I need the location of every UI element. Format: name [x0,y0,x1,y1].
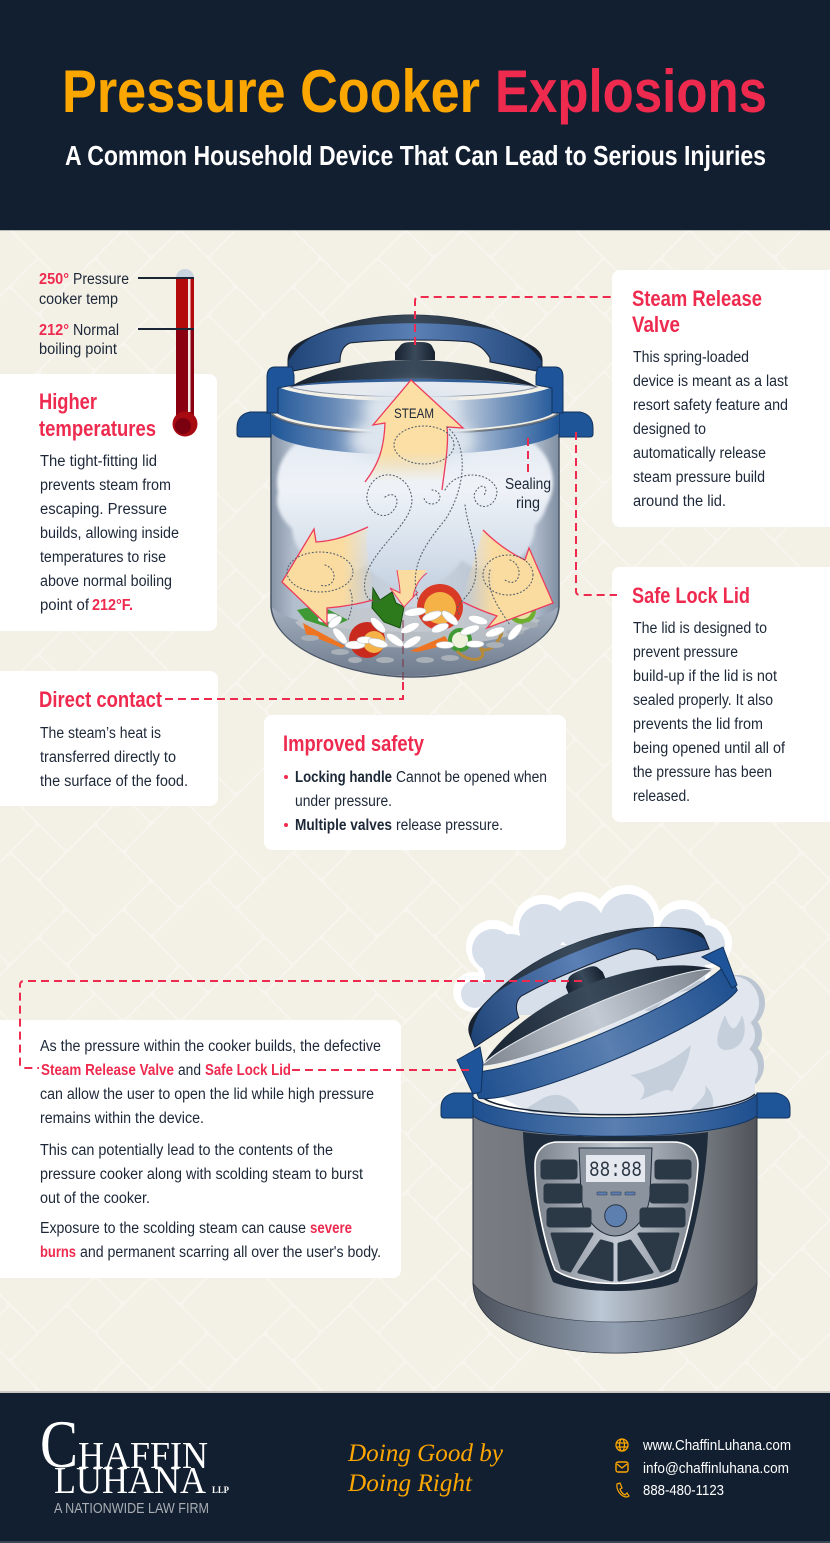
text: safe lock lid body: build-up if the lid is not [633,668,778,685]
thermometer labels: cooker temp [39,291,118,308]
text: higher temperatures body: The tight-fitting lid [40,453,157,470]
upper rim [278,387,552,430]
pot base band [473,1283,757,1353]
steam arrow: down [390,570,427,607]
text: explanation: Safe Lock Lid [205,1062,291,1079]
pot blue rim [473,1094,757,1136]
text: safe lock lid body: being opened until all of [633,740,786,757]
text: safe lock lid body [633,620,786,805]
text: higher temperatures body: 212°F. [92,597,133,614]
heading: higher temperatures [39,389,156,441]
text: explanation: can allow the user to open the lid while high pressure [40,1086,374,1103]
list: safety features: Locking handle [295,769,392,786]
text: steam release valve body: around the lid. [633,493,726,510]
panel: improved safety [264,715,566,850]
text: steam release valve body: This spring-loaded [633,349,749,366]
logo: HAFFIN [78,1435,208,1477]
list: safety features: Cannot be opened when [396,769,547,786]
text: safe lock lid body: released. [633,788,690,805]
panel buttons [542,1161,690,1280]
heading: higher temperatures: Higher [39,389,97,414]
steam plume over rim [350,388,474,466]
heading: improved safety: Improved safety [283,731,425,756]
label: sealing ring [505,476,551,512]
steam cloud [277,434,553,588]
lower rim [271,414,559,455]
text: steam release valve body: automatically release [633,445,766,462]
text: explanation: and permanent scarring all over the user's body. [80,1244,381,1261]
tagline: Doing Right [347,1470,473,1497]
control panel [535,1142,698,1284]
open lid [438,893,744,1114]
lid lug left [457,1047,483,1094]
heading: steam release valve: Steam Release [632,286,762,311]
panel: steam release valve [612,270,830,527]
text: steam release valve body: steam pressure build [633,469,765,486]
text: explanation: pressure cooker along with scolding steam to burst [40,1166,364,1183]
valve knob [395,342,435,360]
text: explanation: Steam Release Valve [41,1062,174,1079]
connector lines: upper cooker [165,297,617,699]
silver underside of lid [290,379,537,397]
text: safe lock lid body: prevent pressure [633,644,738,661]
steam swirls [520,1015,745,1115]
icon: phone [617,1483,629,1497]
lid dark top [469,938,713,1065]
contact details [642,1437,791,1499]
title: Pressure Cooker [62,58,480,125]
text: explanation [40,1038,381,1261]
pot side handle right [757,1093,790,1118]
front steam cloud [490,976,759,1120]
text: explanation: This can potentially lead to the contents of the [40,1142,333,1159]
heading: steam release valve [632,286,762,337]
heading: steam release valve: Valve [632,312,680,337]
digital display: 88:88 [589,1158,642,1183]
title [62,58,767,125]
list: safety features: release pressure. [396,817,503,834]
steam arrow: up [365,380,463,490]
panel: explosion explanation [0,1020,401,1278]
list: safety features [284,769,547,834]
text: explanation: burns [40,1244,76,1261]
text: safe lock lid body: The lid is designed to [633,620,767,637]
white opening [480,1092,545,1117]
logo: C [40,1406,78,1482]
label: steam: STEAM [394,406,434,421]
panel: safe lock lid [612,567,830,822]
text: higher temperatures body: point of [40,597,90,614]
thermometer labels: boiling point [39,341,118,358]
thermometer labels [39,271,129,358]
text: explanation: Exposure to the scolding steam can cause [40,1220,306,1237]
text: explanation: severe [310,1220,352,1237]
text: direct contact body: transferred directly to [40,749,176,766]
title: Explosions [495,58,767,125]
thermometer labels: Normal [73,322,119,339]
side handle right [559,412,593,437]
textured background [0,231,830,1393]
lid top [290,360,537,387]
text: steam release valve body: device is meant as a last [633,373,789,390]
thermometer labels: 250° [39,271,69,288]
text: explanation: out of the cooker. [40,1190,150,1207]
text: higher temperatures body [40,453,179,614]
lid handle top edge [453,896,705,1038]
logo: LUHANA [54,1460,207,1502]
tagline [347,1440,504,1497]
side handle left [237,412,271,437]
control panel backing [523,1132,708,1291]
lid handle [453,896,709,1047]
lid lug right [702,947,737,988]
text: steam release valve body: designed to [633,421,706,438]
text: safe lock lid body: prevents the lid from [633,716,763,733]
text: steam release valve body: resort safety feature and [633,397,788,414]
pot glass body [271,433,559,677]
text: direct contact body: The steam’s heat is [40,725,161,742]
lid blue band [468,964,744,1114]
label: sealing ring: Sealing [505,476,551,493]
text: higher temperatures body: above normal boiling [40,573,172,590]
logo: A NATIONWIDE LAW FIRM [54,1501,209,1517]
food [295,584,540,663]
thermometer labels: 212° [39,322,69,339]
dotted steam swirls [287,426,533,625]
icon: thermometer [138,269,198,436]
text: higher temperatures body: prevents steam from [40,477,171,494]
small indicator bars [597,1192,635,1195]
lid valve knob [562,963,606,995]
contact details: info@chaffinluhana.com [643,1460,789,1477]
heading: higher temperatures: temperatures [39,416,156,441]
dial button [605,1205,627,1227]
footer band [0,1391,830,1543]
thermometer labels: Pressure [73,271,129,288]
icon: globe [616,1439,628,1451]
illustration: pressure cooker cross-section [237,315,593,677]
back steam cloud with white halo [453,885,732,1012]
text: explanation: As the pressure within the cooker builds, the defective [40,1038,381,1055]
text: higher temperatures body: escaping. Pressure [40,501,167,518]
logo: LLP [212,1485,229,1495]
text: safe lock lid body: sealed properly. It also [633,692,773,709]
cloud shadow side [630,975,765,1100]
contact details: www.ChaffinLuhana.com [642,1437,791,1454]
illustration: exploding pressure cooker [438,885,790,1353]
rim lug right [536,367,563,413]
connector lines: lower cooker [20,981,582,1070]
pot side handle left [441,1093,473,1118]
list: safety features: under pressure. [295,793,392,810]
label: sealing ring: ring [516,495,540,512]
icon: envelope [616,1462,628,1472]
rim lug left [267,367,294,413]
panel: higher temperatures [0,374,217,631]
back steam cloud fill [461,894,725,1015]
text: direct contact body [40,725,188,790]
list: safety features: Multiple valves [295,817,392,834]
contact details: 888-480-1123 [643,1482,724,1499]
heading: safe lock lid: Safe Lock Lid [632,583,750,608]
text: explanation: and [178,1062,201,1079]
logo [40,1406,229,1517]
handle bar [288,315,542,372]
pot steel body [473,1112,757,1353]
text: higher temperatures body: temperatures to rise [40,549,166,566]
steam arrow: left [282,527,375,625]
text: steam release valve body [633,349,789,510]
tagline: Doing Good by [347,1440,504,1467]
pot base shading [272,607,558,676]
display housing [579,1148,652,1236]
panel: direct contact [0,671,218,806]
text: safe lock lid body: the pressure has been [633,764,772,781]
header band [0,0,830,231]
steam arrow: right [463,530,553,628]
lid silver underside [475,957,718,1077]
text: explanation: remains within the device. [40,1110,204,1127]
text: higher temperatures body: builds, allowing inside [40,525,179,542]
heading: direct contact: Direct contact [39,687,163,712]
handle top edge [288,315,542,362]
text: direct contact body: the surface of the food. [40,773,188,790]
